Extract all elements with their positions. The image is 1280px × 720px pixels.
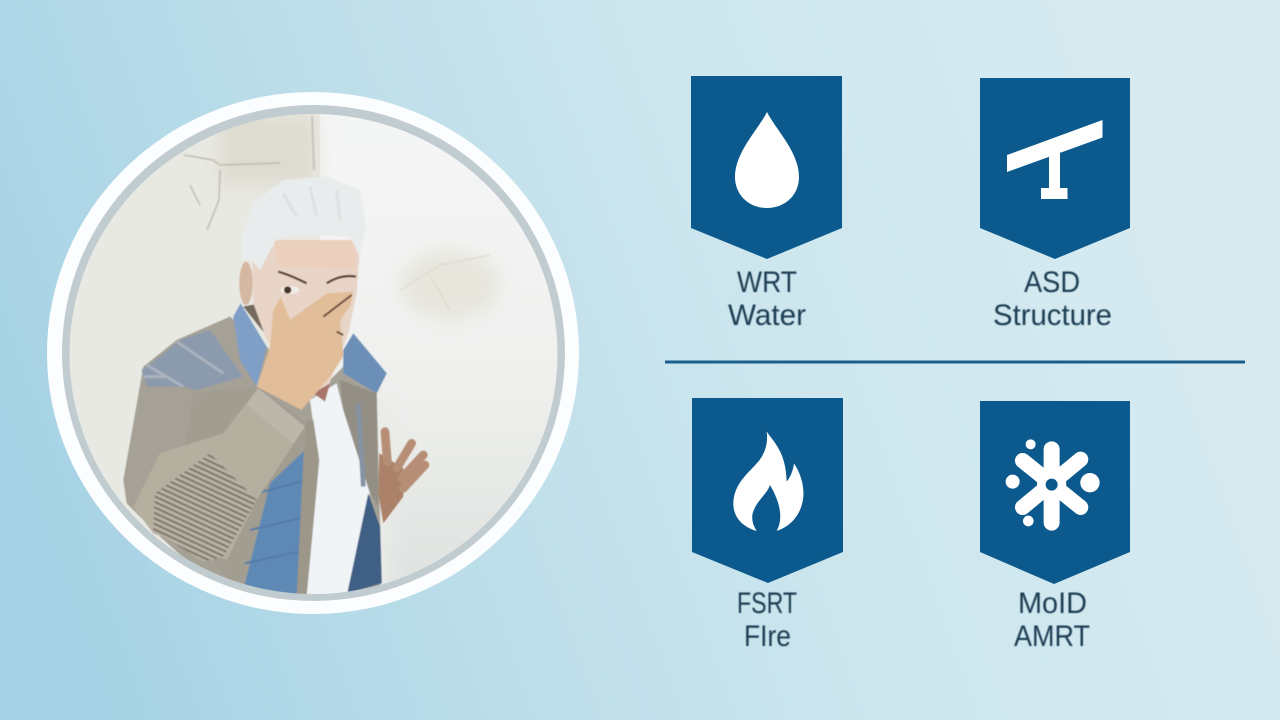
eye xyxy=(281,286,299,294)
photo of man covering his nose xyxy=(60,100,570,610)
panel: Mold AMRT xyxy=(980,401,1130,653)
collar right xyxy=(343,333,387,393)
icon: beam structure xyxy=(1007,120,1102,199)
label: ASD Structure xyxy=(993,266,1112,332)
label: FSRT Fire: FSRT xyxy=(737,587,797,620)
panel: FSRT Fire xyxy=(692,398,843,653)
icon: flame xyxy=(733,432,803,531)
shield badge xyxy=(692,398,843,583)
label: WRT Water: WRT xyxy=(737,266,797,299)
icon: water drop xyxy=(735,112,799,208)
jacket xyxy=(123,317,387,597)
collar left xyxy=(233,303,267,387)
shield badge xyxy=(980,401,1130,584)
label: MoID AMRT: AMRT xyxy=(1014,620,1090,653)
label: WRT Water xyxy=(728,266,806,332)
hair xyxy=(242,177,366,270)
divider line xyxy=(665,360,1245,364)
label: FSRT Fire: FIre xyxy=(744,620,791,653)
face xyxy=(252,247,360,400)
label: WRT Water: Water xyxy=(728,299,806,332)
mouth shadow xyxy=(313,383,330,402)
neck xyxy=(243,304,264,332)
panel: circular photo xyxy=(47,92,579,614)
lower hand on wall xyxy=(378,432,425,523)
jacket front panel xyxy=(183,387,310,593)
jacket left placket xyxy=(297,420,319,597)
label: FSRT Fire xyxy=(737,587,797,653)
panel: WRT Water xyxy=(691,76,842,332)
denim body xyxy=(244,450,304,594)
cuff xyxy=(247,388,305,443)
shield badge xyxy=(691,76,842,259)
denim right xyxy=(347,493,382,593)
label: ASD Structure: ASD xyxy=(1024,266,1080,299)
icon: mold spores xyxy=(1006,439,1100,526)
shoulder blue xyxy=(142,330,243,390)
hand on face xyxy=(257,292,353,410)
shirt xyxy=(306,383,370,597)
sleeve xyxy=(133,390,305,560)
grey ring xyxy=(62,105,565,601)
panel: ASD Structure xyxy=(980,78,1130,332)
jacket right placket xyxy=(340,380,378,507)
label: ASD Structure: Structure xyxy=(993,299,1112,332)
shield badge xyxy=(980,78,1130,259)
label: MoID AMRT: MoID xyxy=(1018,587,1087,620)
label: MoID AMRT xyxy=(1014,587,1090,653)
eyebrow xyxy=(278,272,356,283)
sleeve stripes xyxy=(153,453,257,562)
ear xyxy=(239,262,253,305)
white ring xyxy=(47,92,579,614)
